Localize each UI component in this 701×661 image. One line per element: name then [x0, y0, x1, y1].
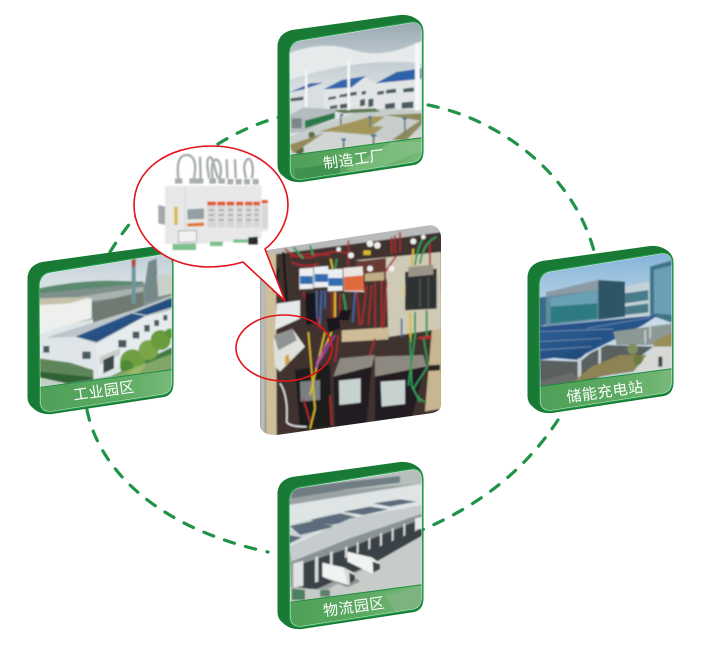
photo: solar carport	[537, 248, 675, 392]
wires	[285, 232, 430, 329]
dashed ring connector	[87, 105, 594, 552]
lower wires	[408, 337, 428, 402]
label: 储能充电站: 储能充电站	[566, 379, 645, 406]
photo: factory	[290, 22, 422, 156]
label: 工业园区: 工业园区	[72, 379, 136, 404]
card: manufacturing plant	[278, 15, 425, 190]
terminal lugs	[367, 240, 373, 247]
center photo: distribution cabinet	[258, 222, 445, 439]
label band	[290, 138, 422, 180]
callout: speech bubble with meter	[134, 146, 288, 301]
callout: highlight ring on cabinet	[236, 315, 332, 381]
card: logistics park	[278, 462, 425, 637]
label band	[40, 370, 172, 412]
icon: multi-circuit meter device	[158, 155, 268, 250]
card: energy storage charging station	[528, 246, 675, 421]
label band	[290, 585, 422, 626]
card: industrial park	[28, 247, 175, 422]
label: 制造工厂: 制造工厂	[322, 147, 386, 173]
photo: logistics warehouse	[287, 463, 425, 607]
label: 物流园区: 物流园区	[322, 595, 386, 620]
label band	[540, 369, 672, 410]
photo: industrial park	[40, 255, 172, 388]
